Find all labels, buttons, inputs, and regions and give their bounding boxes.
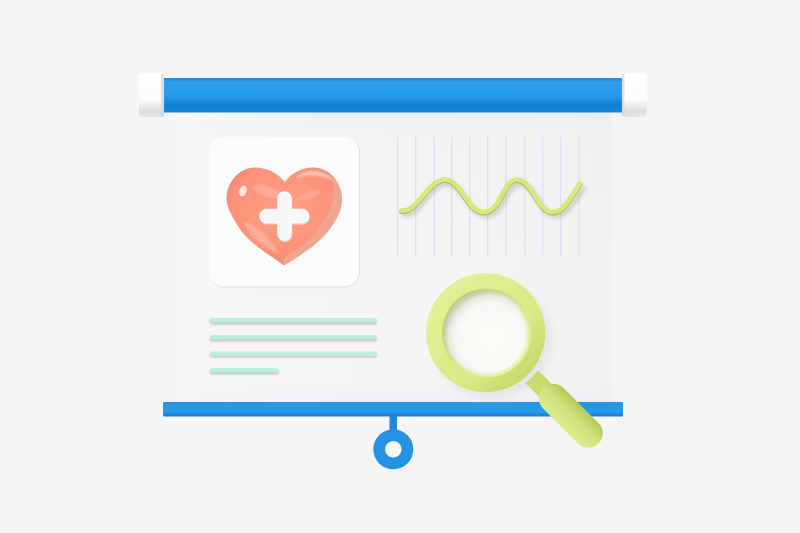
- icon: magnifying glass: [426, 273, 609, 454]
- panel: hanging screen: [175, 112, 612, 403]
- top roller bar: [139, 74, 646, 117]
- icon: white cross: [266, 198, 302, 235]
- icon: heart with medical cross: [226, 167, 342, 266]
- bottom bar: [163, 402, 623, 416]
- chart: pulse line over grid: [398, 137, 584, 256]
- left end cap: [139, 74, 164, 117]
- text placeholder lines: [210, 318, 377, 374]
- handle: [522, 367, 609, 454]
- panel: heart card: [209, 137, 360, 288]
- right end cap: [622, 74, 646, 117]
- pull ring: [373, 416, 413, 469]
- lens ring: [426, 273, 545, 392]
- lens glass: [444, 292, 528, 374]
